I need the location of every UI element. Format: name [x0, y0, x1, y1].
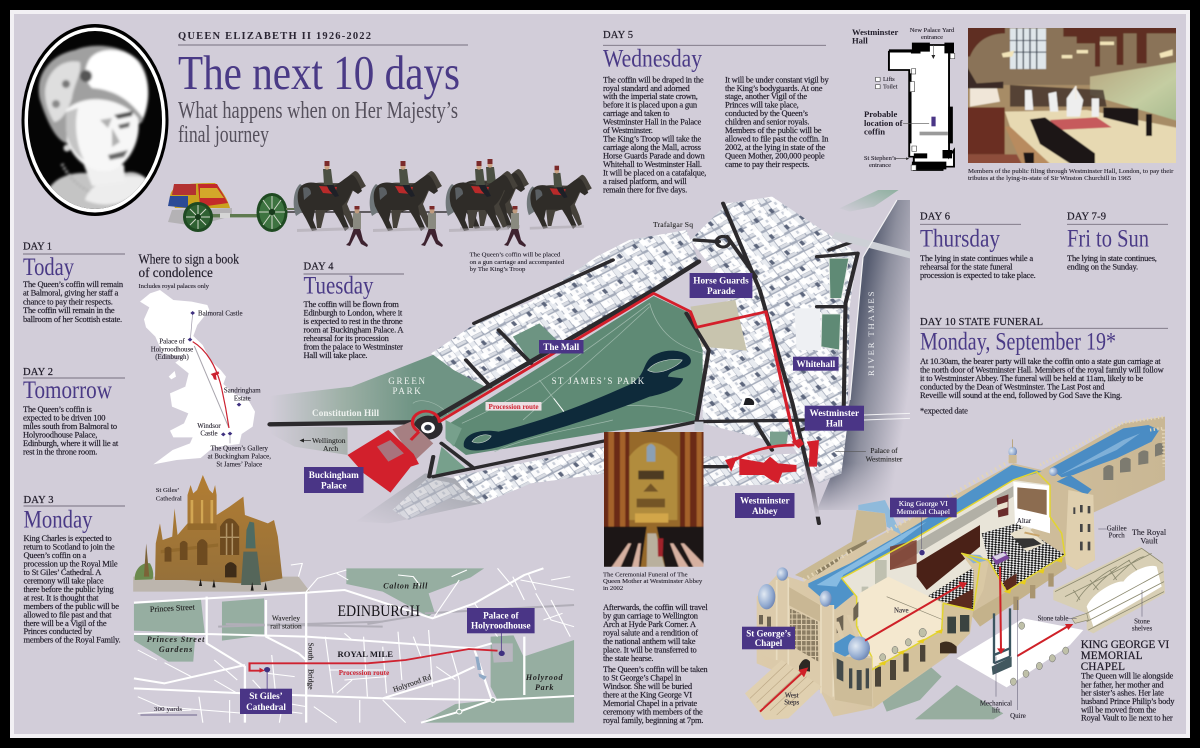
label: Westminster Hall: Hall [826, 418, 843, 428]
text: funeral continued: royal salute and a rendition of [603, 628, 698, 638]
panel: day 4: The coffin will be flown from [304, 299, 399, 309]
panel: day 1: The Queen’s coffin will remain [23, 279, 124, 289]
labels: St George's Chapel: Nave [894, 608, 909, 614]
panel: day 3: return to Scotland to join the [24, 542, 115, 552]
panel: day 10 state funeral: the north door of Westminster Hall. Members of the royal family will follow [920, 364, 1165, 374]
labels: St George's Chapel: Mechanical [980, 700, 1012, 708]
note: palaces only: Includes royal palaces only [138, 283, 210, 290]
label: Westminster Hall [805, 406, 864, 431]
panel: day 2: The Queen’s coffin is [23, 404, 92, 414]
label: Palace of Holyroodhouse: Holyroodhouse [471, 620, 531, 630]
text: funeral continued: Arch at Hyde Park Corner. A [603, 619, 697, 629]
text: funeral continued: by gun carriage to Wellington [603, 610, 699, 620]
map labels: UK: St James’ Palace [216, 461, 262, 468]
caption: gun carriage: on a gun carriage and accompanied [470, 259, 565, 266]
labels: Edinburgh: Gardens [159, 645, 193, 654]
panel: day 3: members of the Royal Family. [24, 635, 121, 645]
label: Whitehall: Whitehall [796, 359, 836, 369]
caption: Westminster Abbey photo: Queen Mother at Westminster Abbey [603, 578, 703, 585]
panel: King George VI Memorial Chapel: Royal Vault to lie next to her [1081, 713, 1173, 723]
panel: day 3: Monday [24, 507, 93, 534]
label: St George's Chapel: Chapel [755, 638, 783, 648]
labels: Edinburgh: Princes Street [147, 635, 205, 644]
labels: St George's Chapel: Steps [784, 700, 799, 706]
panel: day 5: Members of the public will be [725, 125, 822, 135]
map labels: UK: Holyroodhouse [151, 347, 193, 354]
map: central London procession route: ST JAMES’S PARK [552, 376, 646, 386]
map: central London procession route: RIVER THAMES [866, 290, 876, 376]
subtitle: final journey [178, 122, 269, 148]
subtitle: What happens when on Her Majesty’s [178, 98, 458, 124]
panel: day 3: King Charles is expected to [24, 533, 112, 543]
text: funeral continued: to St George’s Chapel in [603, 672, 682, 682]
galilee tower [1065, 490, 1095, 570]
panel: day 5: Queen Mother, 200,000 people [725, 150, 825, 160]
panel: day 4: room at Buckingham Palace. A [304, 324, 404, 334]
panel: day 5: stage, another Vigil of the [725, 91, 807, 101]
panel: day 4: Edinburgh to London, where it [304, 308, 403, 318]
coffin [992, 552, 1009, 565]
panel: day 2: Holyroodhouse Palace, [23, 430, 97, 440]
text: funeral continued: place. It will be transferred to [603, 644, 696, 654]
panel: day 7-9: The lying in state continues, [1067, 253, 1157, 263]
panel: day 4: Tuesday [304, 272, 374, 300]
caption: gun carriage: by The King’s Troop [470, 266, 526, 273]
labels: Edinburgh: Park [535, 683, 554, 692]
panel: day 6: DAY 6 [920, 212, 950, 222]
panel: day 2: miles south from Balmoral to [23, 421, 117, 431]
steps [745, 660, 822, 720]
panel: day 10 state funeral: conducted by the Dean of Westminster. The Last Post and [920, 382, 1105, 392]
panel: King George VI Memorial Chapel: husband Prince Philip’s body [1081, 696, 1175, 706]
panel: day 6: Thursday [920, 226, 1000, 253]
map: central London procession route: Wellington [312, 436, 346, 445]
label: St Giles' Cathedral box [240, 689, 292, 714]
panel: day 5: allowed to file past the coffin. In [725, 134, 829, 144]
floor plan: Westminster Hall: Westminster [852, 27, 898, 37]
panel: day 3 [24, 495, 125, 645]
panel: day 10 state funeral: Monday, September 19* [920, 328, 1116, 355]
panel: day 5: royal standard and adorned [603, 83, 691, 93]
text: funeral continued: Memorial Chapel in a private [603, 698, 697, 708]
buildings [431, 230, 699, 388]
floor plan: Westminster Hall: St Stephen’s [864, 155, 897, 162]
panel: day 1: chance to pay their respects. [23, 296, 113, 306]
labels: St George's Chapel: The Royal [1132, 528, 1167, 537]
panel: day 5: It will be placed on a catafalque, [603, 167, 706, 177]
title: The next 10 days [178, 45, 460, 100]
stalls [917, 525, 980, 590]
label: Buckingham Palace: Buckingham [309, 470, 359, 480]
text: funeral continued: Afterwards, the coffin will travel [603, 602, 708, 612]
panel: day 5: with the imperial state crown, [603, 91, 698, 101]
transept [795, 510, 887, 580]
panel: day 5: children and senior royals. [725, 117, 809, 127]
panel: day 1: ballroom of her Scottish estate. [23, 314, 122, 324]
panel: day 3: members of the public will be [24, 601, 119, 611]
panel: day 4: DAY 4 [304, 262, 334, 272]
panel: day 7-9 [1067, 212, 1168, 272]
panel: King George VI Memorial Chapel: The Queen will lie alongside [1081, 671, 1173, 681]
label: Horse Guards Parade [690, 273, 752, 298]
interior walls [842, 480, 1050, 627]
labels: Edinburgh: South [306, 642, 316, 660]
panel: day 7-9: Fri to Sun [1067, 226, 1149, 253]
stone silhouette [757, 417, 1165, 717]
label: King George VI Memorial Chapel: Memorial Chapel [897, 507, 950, 516]
panel: day 5: Westminster Hall in the Palace [603, 117, 701, 127]
photo: Westminster Hall lying-in-state [965, 25, 1180, 167]
panel: day 1 [23, 242, 125, 324]
caption: gun carriage: The Queen’s coffin will be placed [470, 252, 561, 258]
floor plan: Westminster Hall: Hall [852, 36, 868, 46]
panel: day 5: of Westminster. [603, 125, 653, 135]
panel: King George VI Memorial Chapel [1081, 639, 1175, 723]
panel: King George VI Memorial Chapel: will be moved from the [1081, 704, 1156, 714]
lift [994, 608, 1010, 663]
caption: Westminster Abbey photo: in 2002 [603, 585, 623, 592]
royal vault [1053, 547, 1165, 633]
labels: St George's Chapel: Stone [1134, 618, 1150, 626]
map labels: UK: at Buckingham Palace, [208, 453, 271, 460]
St James's Park [446, 296, 708, 455]
label: Buckingham Palace [304, 467, 364, 493]
photo: Westminster Abbey funeral [604, 432, 704, 567]
panel: day 7-9: ending on the Sunday. [1067, 262, 1138, 272]
label: Horse Guards Parade: Parade [707, 286, 735, 296]
labels: Edinburgh: Holyrood [525, 673, 564, 682]
labels: St George's Chapel: Stone table [1038, 616, 1068, 622]
terrain fades [817, 200, 910, 510]
label: Buckingham Palace: Palace [321, 480, 347, 490]
panel: where to sign a book of condolence [138, 252, 271, 468]
label: Westminster Abbey [735, 493, 794, 518]
panel: day 3: to St Giles’ Cathedral. A [24, 567, 102, 577]
panel: day 5: Wednesday [603, 46, 702, 73]
panel: day 6: The lying in state continues while a [920, 253, 1033, 263]
map labels: UK: Balmoral Castle [198, 311, 243, 318]
yellow cut outline [842, 472, 1065, 670]
labels: St George's Chapel: West [785, 692, 799, 700]
map: central London procession route: Palace of [870, 446, 898, 455]
labels: Edinburgh [147, 582, 564, 713]
labels: Edinburgh: Calton Hill [383, 582, 428, 590]
panel: King George VI Memorial Chapel: her father, her mother and [1081, 679, 1164, 689]
label: Whitehall [793, 357, 839, 371]
panel: day 4: from the palace to Westminster [304, 342, 403, 352]
panel: day 10 state funeral [920, 317, 1168, 416]
kicker: QUEEN ELIZABETH II 1926-2022 [178, 31, 371, 42]
map: central London procession route: GREEN [388, 376, 427, 386]
map labels: UK: Castle [200, 431, 218, 438]
panel: day 5: carriage and taken to [603, 108, 669, 118]
labels: St George's Chapel: Galilee [1107, 526, 1127, 532]
labels: Edinburgh: ROYAL MILE [338, 649, 393, 659]
floor plan: Westminster Hall: entrance [921, 34, 943, 41]
panel: day 2: Edinburgh, where it will lie at [23, 438, 119, 448]
panel: day 1: at Balmoral, giving her staff a [23, 288, 118, 298]
route in red [411, 293, 795, 444]
labels: St George's Chapel: Vault [1140, 536, 1158, 546]
panel: day 5: remain there for five days. [603, 184, 687, 194]
portrait of the Queen [22, 24, 168, 216]
labels: Edinburgh: rail station [270, 622, 302, 630]
labels: St George's Chapel: Quire [1010, 713, 1026, 720]
map: Edinburgh [134, 563, 574, 723]
panel: day 2: rest in the throne room. [23, 446, 97, 456]
panel: day 6: procession is expected to take place. [920, 270, 1036, 280]
panel: day 3: DAY 3 [24, 495, 54, 506]
panel: King George VI Memorial Chapel: KING GEORGE VI [1081, 639, 1170, 651]
illustration: gun carriage and The King's Troop [168, 159, 592, 247]
labels: Edinburgh: Princes Street [150, 603, 196, 614]
label: St Giles' Cathedral: St Giles’ [156, 487, 179, 494]
panel: day 10 state funeral: At 10.30am, the bearer party will take the coffin onto a state gun carriage at [920, 356, 1161, 366]
label: Horse Guards Parade: Horse Guards [693, 276, 749, 286]
heading: condolence: Where to sign a book [138, 252, 239, 266]
ground patches [875, 663, 1003, 719]
text: funeral continued: royal family, beginning at 7pm. [603, 715, 703, 725]
panel: day 6: rehearsal for the state funeral [920, 262, 1013, 272]
panel: day 1: Today [23, 254, 74, 281]
panel: day 3: allowed to file past and that [24, 609, 112, 619]
map: central London procession route: Arch [323, 444, 338, 453]
labels: St George's Chapel [742, 498, 1167, 720]
panel: King George VI Memorial Chapel: CHAPEL [1081, 661, 1125, 673]
panel: day 5: Princes will take place, [725, 100, 799, 110]
panel: day 4: is expected to rest in the throne [304, 316, 403, 326]
floor plan: Westminster Hall: Probable [864, 109, 897, 119]
labels: Edinburgh: Bridge [306, 669, 316, 690]
floor plan: Westminster Hall: coffin [864, 127, 885, 137]
map labels: UK: Windsor [197, 423, 221, 430]
map: central London procession route: Constitution Hill [312, 408, 379, 418]
label: Palace of Holyroodhouse: Palace of [483, 610, 519, 620]
panel: day 5 [603, 30, 829, 194]
leaders [922, 517, 1142, 710]
floor plan: Westminster Hall [852, 27, 955, 170]
panel: day 5: before it is placed upon a gun [603, 100, 698, 110]
labels: St George's Chapel: shelves [1132, 626, 1152, 632]
panel: day 3: at rest. It is thought that [24, 592, 99, 602]
labels: Edinburgh: 300 yards [154, 706, 182, 713]
panel: day 10 state funeral: DAY 10 STATE FUNERAL [920, 317, 1043, 328]
floor plan: Westminster Hall: Toilet [883, 84, 898, 90]
panel: day 3: Queen’s coffin on a [24, 550, 86, 560]
map: UK [140, 290, 255, 464]
labels: St George's Chapel: Porch [1109, 532, 1125, 540]
panel: day 6 [920, 212, 1036, 280]
west front [745, 567, 873, 720]
panel: day 5: DAY 5 [603, 30, 633, 41]
map labels: UK: The Queen’s Gallery [211, 445, 269, 452]
panel: day 5: It will be under constant vigil by [725, 74, 829, 84]
panel: day 5: the King’s bodyguards. At one [725, 83, 823, 93]
main roof [808, 465, 1042, 609]
floors [927, 563, 980, 611]
label: St Giles' Cathedral: Cathedral [156, 495, 182, 502]
map: central London procession route: Westminster [866, 454, 903, 463]
floor plan: Westminster Hall: New Palace Yard [910, 27, 955, 34]
panel: day 3: there will be a Vigil of the [24, 618, 107, 628]
illustration: St Giles' Cathedral [133, 475, 310, 592]
caption: Westminster Hall photo: Members of the public filing through Westminster Hall, London, to pay their [968, 168, 1174, 175]
text: funeral continued: the national anthem will take [603, 636, 696, 646]
map labels: UK: Sandringham [224, 388, 261, 395]
panel: day 5: Horse Guards Parade and down [603, 150, 705, 160]
panel: day 1: DAY 1 [23, 242, 52, 252]
label: St Giles' Cathedral box: Cathedral [246, 702, 286, 712]
panel: day 3: procession up the Royal Mile [24, 558, 118, 568]
label: St George's Chapel: St George’s [746, 628, 791, 638]
label: The Mall: The Mall [543, 342, 580, 352]
panel: day 4: rehearsal for its procession [304, 333, 390, 343]
map labels: UK: (Edinburgh) [155, 354, 189, 361]
label: King George VI Memorial Chapel: King George VI [899, 499, 948, 508]
panel: day 5: carriage along the Mall, across [603, 142, 701, 152]
panel: King George VI Memorial Chapel: her sister’s ashes. Her late [1081, 688, 1164, 698]
panel: day 5: a raised platform, and will [603, 176, 687, 186]
label: St George's Chapel [742, 627, 795, 649]
text: funeral continued: the state hearse. [603, 653, 653, 663]
roads [270, 262, 699, 432]
text: funeral continued: Windsor. She will be buried [603, 681, 693, 691]
label: procession route: Procession route [489, 403, 538, 411]
map: central London procession route: PARK [393, 386, 422, 396]
label: St Giles' Cathedral box: St Giles’ [249, 691, 283, 701]
label: Palace of Holyroodhouse [467, 608, 535, 633]
panel: day 1: The coffin will remain in the [23, 305, 115, 315]
labels: Edinburgh: Holyrood Rd [392, 672, 433, 694]
labels: Edinburgh: EDINBURGH [338, 603, 420, 620]
label: King George VI Memorial Chapel [890, 498, 957, 517]
map: central London procession route [270, 190, 910, 523]
panel: day 3: there before the public lying [24, 584, 114, 594]
panel: day 2 [23, 367, 125, 456]
panel: day 5: 2002, at the lying in state of the [725, 142, 826, 152]
map labels: UK: Palace of [159, 339, 185, 346]
caption: Westminster Hall photo: tributes at the lying-in-state of Sir Winston Churchill in 1965 [968, 175, 1132, 182]
urns [880, 622, 1069, 685]
panel: King George VI Memorial Chapel: MEMORIAL [1081, 650, 1143, 662]
floor plan: Westminster Hall: Lifts [883, 76, 895, 83]
route: Royal Mile procession [250, 649, 498, 671]
panel: day 5: The King’s Troop will take the [603, 134, 701, 144]
labels: London map: Trafalgar Sq [653, 220, 693, 229]
floor plan: Westminster Hall: entrance [869, 162, 891, 169]
panel: day 10 state funeral: *expected date [920, 406, 968, 416]
panel: day 5: The coffin will be draped in the [603, 74, 704, 84]
label: Westminster Abbey: Abbey [752, 506, 778, 516]
panel: day 4: Hall will take place. [304, 350, 367, 360]
heading: condolence: of condolence [138, 265, 213, 280]
panel: day 2: DAY 2 [23, 367, 53, 378]
forecourt and Buckingham Palace [392, 422, 433, 461]
label: The Mall [539, 340, 584, 354]
panel: day 5: came to pay their respects. [725, 159, 810, 169]
map labels: UK: Estate [234, 396, 251, 403]
small domes [1008, 447, 1017, 457]
label: Westminster Hall: Westminster [810, 408, 859, 418]
text: funeral continued: there at the King George VI [603, 690, 692, 700]
panel: day 5: conducted by the Queen’s [725, 108, 808, 118]
labels: St George's Chapel: lift [992, 708, 1000, 714]
floor plan: Westminster Hall: location of [864, 118, 903, 128]
red route arrows [760, 567, 1068, 712]
labels: St George's Chapel: Altar [1017, 518, 1032, 525]
panel: day 3: Princes conducted by [24, 626, 93, 636]
labels: Edinburgh: Procession route [339, 669, 389, 677]
lady chapel roof and wall [1050, 425, 1159, 477]
text: funeral continued: The Queen’s coffin will be taken [603, 664, 708, 674]
labels: Edinburgh: Waverley [272, 614, 300, 622]
south wall [872, 630, 943, 708]
panel: day 4 [304, 262, 404, 360]
map labels: UK [151, 311, 271, 468]
panel: day 10 state funeral: it to Westminster Abbey. The funeral will be held at 11am, likely to be [920, 373, 1144, 383]
caption: Westminster Abbey photo: The Ceremonial Funeral of The [603, 571, 688, 578]
panel: day 5: Whitehall to Westminster Hall. [603, 159, 702, 169]
panel: day 7-9: DAY 7-9 [1067, 212, 1106, 222]
label: Westminster Abbey: Westminster [740, 496, 790, 506]
panel: day 2: expected to be driven 100 [23, 412, 105, 422]
text: funeral continued: ceremony with members of the [603, 706, 703, 716]
panel: day 10 state funeral: Reveille will sound at the end, followed by God Save the King. [920, 390, 1122, 400]
panel: day 2: Tomorrow [23, 377, 112, 404]
illustration: St George's Chapel cutaway [745, 417, 1165, 720]
panel: day 3: ceremony will take place [24, 575, 104, 585]
